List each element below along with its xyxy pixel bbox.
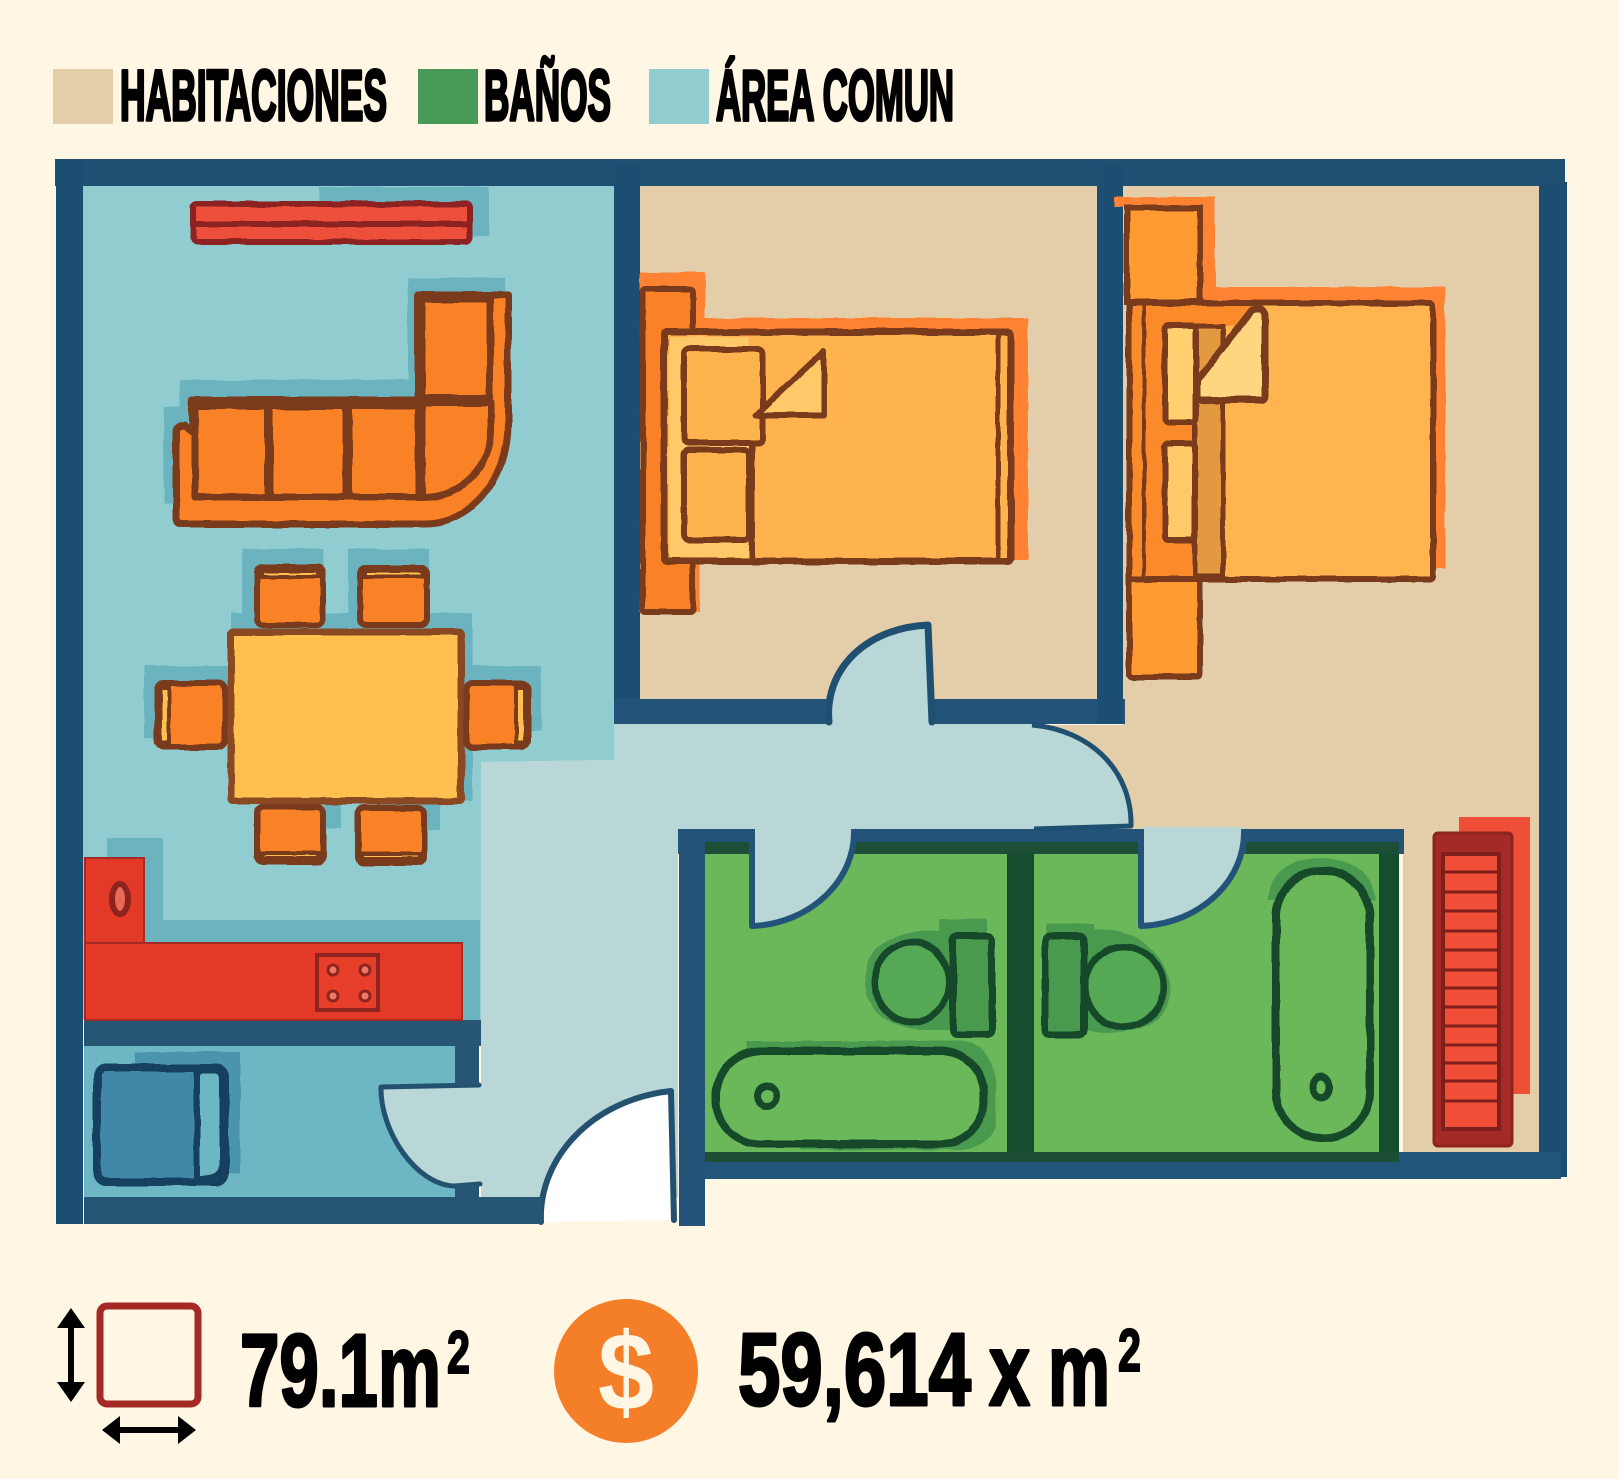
legend swatch: habitaciones	[53, 69, 113, 124]
toilet	[865, 919, 992, 1035]
floor: living and dining area	[83, 185, 614, 1020]
folded corner	[756, 351, 824, 415]
pillows	[1165, 326, 1196, 422]
furniture: sofa	[164, 278, 508, 524]
bathroom two fixtures	[1045, 858, 1376, 1138]
stat: surface area	[57, 1306, 470, 1444]
furniture: dining table with chairs	[144, 549, 541, 863]
value multiply sign: x	[989, 1312, 1030, 1427]
door: bathroom one	[752, 827, 854, 926]
value: surface area: 79.1m	[240, 1313, 441, 1428]
nightstand	[643, 289, 693, 612]
table and chair shadows	[144, 549, 541, 830]
furniture: tv unit	[193, 187, 489, 242]
mattress	[1129, 303, 1433, 579]
superscript: surface area: 2	[447, 1319, 470, 1386]
floor: bathrooms	[705, 842, 1399, 1161]
pillows	[684, 349, 763, 443]
floor: laundry	[84, 1046, 456, 1198]
bathtub	[1268, 858, 1376, 1138]
legend: HABITACIONES	[120, 57, 387, 136]
icon: square with dimension arrows	[57, 1306, 198, 1444]
floor: hallway	[481, 723, 1130, 1197]
floor: bedroom one	[640, 185, 1098, 700]
table	[231, 632, 461, 801]
superscript: price: 2	[1118, 1317, 1141, 1384]
furniture: closet	[1434, 817, 1530, 1146]
interior bath shading	[1007, 853, 1399, 1153]
bathroom one fixtures	[716, 919, 996, 1150]
icon: dollar coin	[554, 1299, 698, 1443]
furniture: bed two	[1114, 197, 1445, 677]
door: bathroom two	[1141, 827, 1244, 926]
chair backs	[160, 571, 525, 859]
floor: bedroom two	[1032, 185, 1540, 1153]
icon: dollar coin: $	[598, 1311, 654, 1434]
bath wall overlays	[705, 842, 1399, 1162]
value unit: m	[1048, 1312, 1110, 1427]
furniture: washing machine	[97, 1052, 240, 1182]
value: price per square metre	[738, 1312, 1110, 1427]
chairs	[157, 567, 528, 863]
text: ÁREA COMUN	[716, 57, 954, 136]
door: entrance	[541, 1091, 674, 1222]
blanket	[752, 337, 995, 557]
stat: price	[554, 1299, 1141, 1443]
stove	[317, 955, 378, 1010]
toilet	[1045, 924, 1170, 1035]
value digits: 59,614	[738, 1312, 971, 1427]
furniture: kitchen counter	[85, 838, 480, 1020]
sheet strip	[1195, 326, 1223, 576]
furniture: bed one	[640, 272, 1028, 612]
legend swatch: área comun	[649, 69, 709, 124]
bathtub	[716, 1041, 996, 1150]
nightstand bottom	[1129, 576, 1200, 677]
legend	[53, 57, 954, 136]
door: bedroom one	[829, 625, 932, 726]
walls	[55, 159, 1567, 1226]
floor plan	[55, 159, 1567, 1226]
sink	[112, 884, 128, 914]
folded corner	[1197, 309, 1265, 400]
mattress	[664, 332, 1011, 561]
legend: BAÑOS	[484, 57, 611, 136]
nightstand top	[1127, 208, 1200, 302]
door: bedroom two	[1032, 725, 1131, 829]
legend swatch: baños	[418, 69, 478, 124]
door: kitchen swing	[381, 1085, 481, 1186]
